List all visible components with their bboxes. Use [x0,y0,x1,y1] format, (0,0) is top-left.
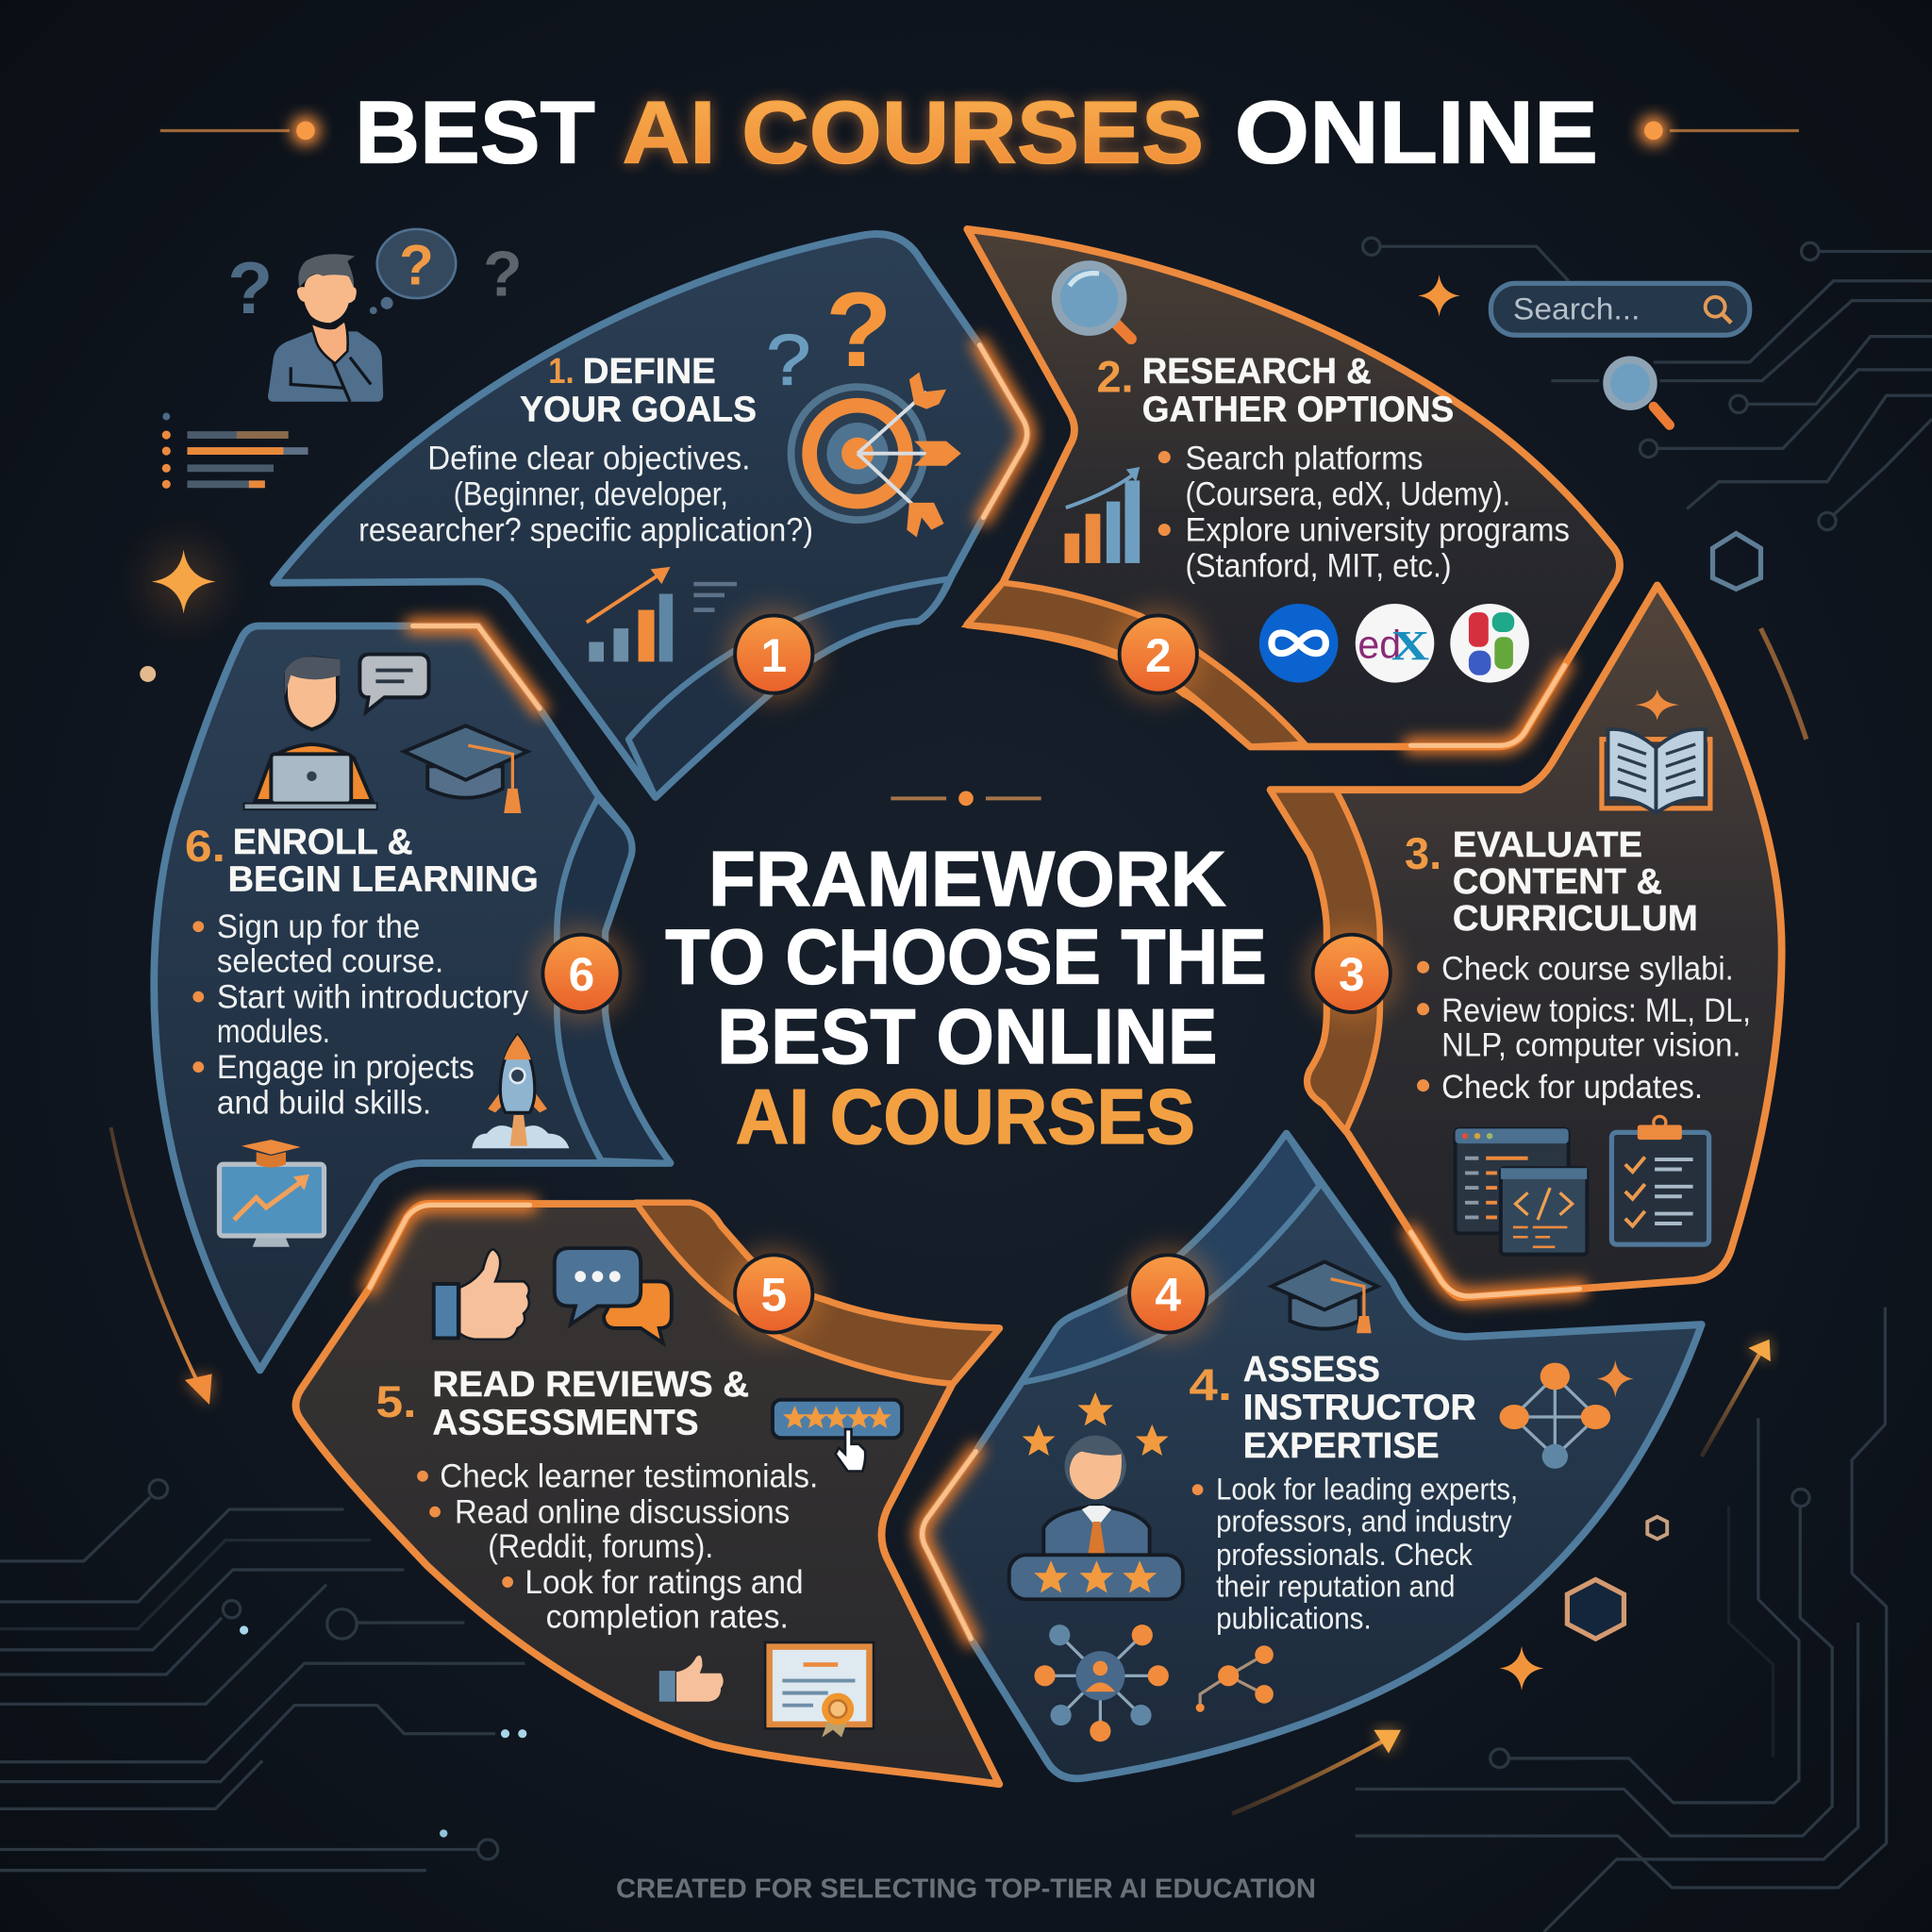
body bullets: (Coursera, edX, Udemy). [1185,476,1510,513]
accent line right [1760,628,1807,740]
body bullets: selected course. [217,943,443,980]
icon: people network [1034,1624,1169,1741]
icon: target with arrows [791,372,961,537]
sparkle left [144,542,223,621]
badge 5: 5 [760,1269,787,1322]
heading: 5. [375,1376,416,1426]
heading [1189,1350,1476,1466]
badge 3: 3 [1339,948,1365,1001]
icon: chat bubble [359,655,429,712]
center title [665,837,1267,1160]
heading: DEFINE [583,352,716,391]
icon: speech bubbles [555,1248,672,1343]
badge 2 [1111,608,1205,701]
icon: small hexagon [1647,1517,1667,1539]
center title: BEST ONLINE [717,994,1217,1080]
icon: small nodes [1196,1645,1274,1712]
badge 4: 4 [1155,1269,1181,1322]
heading [375,1365,749,1442]
icon: question bubble: ? [399,234,434,297]
badge 5 [727,1247,821,1341]
title: BEST [355,82,595,181]
icon: small thumbs up [659,1656,724,1702]
icon: code windows [1456,1128,1587,1255]
heading: EVALUATE [1453,825,1642,865]
heading [520,352,757,430]
footer: CREATED FOR SELECTING TOP-TIER AI EDUCATION [616,1874,1316,1904]
panel 5: read reviews and assessments [295,1203,999,1784]
icon: magnifier right [1607,359,1670,425]
center title: AI COURSES [736,1074,1195,1160]
icon: checklist clipboard [1611,1116,1709,1244]
icon: orange question mark: ? [825,270,892,389]
icon: growth chart [587,567,737,661]
body text [1192,1472,1518,1636]
badge 1: 1 [760,629,787,682]
body bullets [192,908,529,1122]
heading: INSTRUCTOR [1243,1389,1476,1428]
search bar: Search... [1513,291,1640,325]
icon: thinking person [268,254,383,402]
title: AI COURSES [623,82,1204,181]
body bullets: modules. [217,1013,330,1050]
search bar [1491,283,1750,335]
heading: RESEARCH & [1142,352,1372,391]
icon: large hexagon [1567,1579,1624,1639]
body bullets: Check learner testimonials. [440,1457,818,1494]
icon: sparkle [1597,1360,1634,1397]
badge 2: 2 [1145,629,1172,682]
center title: TO CHOOSE THE [665,914,1267,1000]
center title: FRAMEWORK [708,837,1226,923]
icon: graduation cap [404,725,527,813]
body text: professionals. Check [1216,1537,1473,1572]
body bullets: Read online discussions [455,1493,790,1530]
title: ONLINE [1235,82,1598,181]
body text: professors, and industry [1216,1504,1512,1539]
body bullets: Review topics: ML, DL, [1441,992,1751,1029]
icon: left question mark: ? [227,246,273,329]
title [355,82,1598,181]
decorative dots [240,1625,526,1838]
panel 2: research and gather options [967,229,1620,747]
icon: open book [1602,729,1710,813]
panel 6: enroll and begin learning [154,626,671,1370]
dot left [140,666,156,682]
heading: 2. [1096,351,1134,401]
body text: researcher? specific application?) [358,511,813,548]
title ornament left [160,116,321,145]
heading [185,821,539,899]
heading: 3. [1405,828,1441,878]
circuit traces: bottom right [1356,1307,1887,1932]
arrow right up [1702,1340,1771,1457]
body bullets [1158,441,1570,584]
icon: magnifier [1056,265,1131,339]
heading: EXPERTISE [1243,1426,1440,1466]
icon: rocket [472,1035,569,1148]
body bullets: Check for updates. [1441,1069,1703,1106]
body text: publications. [1216,1601,1372,1636]
icon: network diamond [1500,1363,1610,1469]
heading: BEGIN LEARNING [228,859,539,899]
logo: udemy style blocks [1450,604,1529,683]
body bullets: Look for ratings and [525,1564,804,1601]
heading: YOUR GOALS [520,391,757,430]
sparkle lower right [1500,1646,1544,1690]
icon: right question mark: ? [483,239,523,309]
body bullets: NLP, computer vision. [1441,1026,1741,1063]
body bullets: Engage in projects [217,1049,475,1086]
center ornament [891,791,1041,806]
panel 3: evaluate content and curriculum [1271,585,1782,1297]
panel 4: assess instructor expertise [923,1134,1702,1778]
body text: their reputation and [1216,1569,1456,1604]
icon: rising chart [1064,467,1140,563]
body text [358,441,813,548]
icon: person at laptop [244,657,377,809]
mini bar list [162,413,308,489]
icon: sparkle [1635,690,1679,720]
icon: certificate [765,1642,874,1738]
panel 1: define your goals [274,234,1027,797]
heading: CONTENT & [1453,862,1662,902]
logo: edX: ed [1357,622,1401,666]
body bullets: Search platforms [1185,441,1424,477]
heading: ENROLL & [233,823,413,862]
badge 6: 6 [569,948,594,1001]
body text: Define clear objectives. [427,441,750,477]
body text: (Beginner, developer, [454,476,728,513]
heading: ASSESS [1243,1350,1380,1390]
body bullets: Check course syllabi. [1441,950,1734,987]
heading [1405,825,1698,939]
body bullets [417,1457,818,1635]
body bullets: (Reddit, forums). [488,1528,713,1565]
logo: edX: X [1391,622,1429,669]
heading: CURRICULUM [1453,899,1698,939]
arrow left down [111,1127,212,1405]
icon: star rating pill with cursor [773,1400,902,1472]
sparkle top [1418,275,1460,317]
heading [1096,351,1454,430]
heading: 6. [185,821,225,871]
body bullets: Explore university programs [1185,511,1570,548]
arrow bottom [1232,1730,1401,1814]
badge 1 [727,608,821,701]
body text: Look for leading experts, [1216,1472,1518,1507]
body bullets: and build skills. [217,1085,431,1122]
heading: GATHER OPTIONS [1142,391,1454,430]
icon: thumbs up [434,1249,529,1340]
title ornament right [1639,116,1799,145]
icon: graduation cap [1272,1261,1377,1333]
icon: hexagon outline top right [1713,534,1760,589]
title: AI COURSES [623,82,1204,181]
icon: blue question mark: ? [766,321,810,401]
body bullets: completion rates. [546,1598,789,1635]
logo: edX [1356,604,1434,683]
badge 3 [1305,926,1398,1020]
circuit traces: bottom left [0,1480,525,1871]
body bullets: Sign up for the [217,908,420,945]
step badges [535,608,1398,1341]
badge 6 [535,926,628,1020]
heading: ASSESSMENTS [432,1403,699,1442]
body bullets: Start with introductory [217,978,529,1015]
body bullets: (Stanford, MIT, etc.) [1185,547,1452,584]
icon: expert with stars [1009,1392,1183,1599]
icon: question bubble [370,229,456,314]
heading: READ REVIEWS & [432,1365,749,1405]
logo: coursera [1259,604,1338,683]
badge 4 [1122,1247,1215,1341]
heading: 1. [548,352,575,391]
heading: 4. [1189,1359,1232,1409]
circuit traces: top right [1363,238,1932,530]
icon: monitor with chart [219,1140,325,1247]
body bullets [1417,950,1751,1106]
